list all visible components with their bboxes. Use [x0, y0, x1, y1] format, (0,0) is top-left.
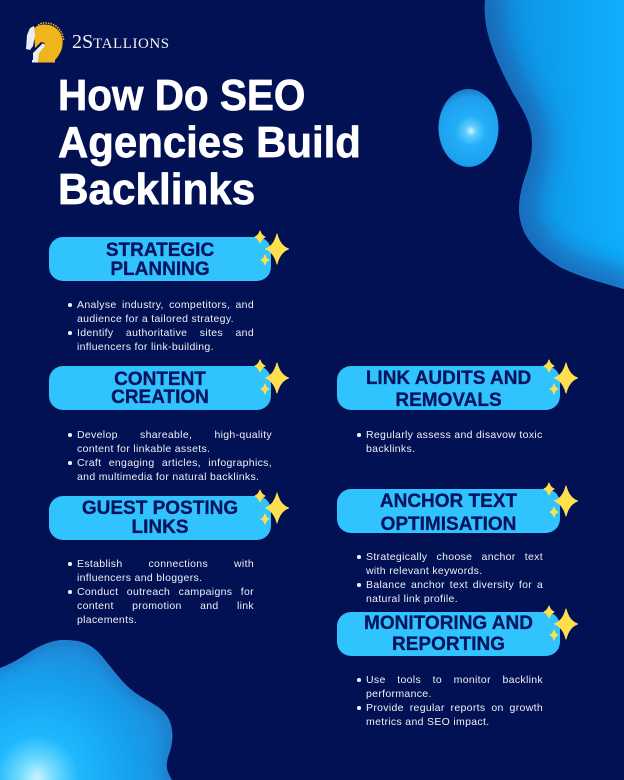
text block: guest posting bullets: influencers and bloggers. — [77, 572, 202, 584]
text block: link audits bullets — [357, 429, 543, 455]
top right blob — [484, 0, 624, 289]
text block: strategic planning bullets: Analyse industry, competitors, and — [77, 299, 254, 311]
text block: monitoring bullets: Use tools to monitor backlink — [366, 674, 543, 686]
text block: monitoring bullets: metrics and SEO impact. — [366, 716, 489, 728]
panel: anchor text optimisation heading: ANCHOR TEXT — [380, 491, 517, 512]
panel: monitoring and reporting heading: REPORTING — [392, 634, 505, 655]
text block: strategic planning bullets: influencers for link-building. — [77, 341, 214, 353]
title: How Do SEO — [58, 71, 305, 120]
logo: 2Stallions horse icon — [26, 22, 65, 62]
text block: guest posting bullets: Establish connections with — [77, 558, 254, 570]
text block: content creation bullets: Develop shareable, high-quality — [77, 429, 272, 441]
title: Agencies Build — [58, 118, 361, 167]
text block: strategic planning bullets: Identify authoritative sites and — [77, 327, 254, 339]
text block: monitoring bullets: Provide regular reports on growth — [366, 702, 543, 714]
text block: guest posting bullets: Conduct outreach campaigns for — [77, 586, 254, 598]
panel: strategic planning heading: STRATEGIC — [106, 240, 214, 261]
text block: content creation bullets: and multimedia for natural backlinks. — [77, 471, 259, 483]
text block: monitoring bullets: performance. — [366, 688, 432, 700]
panel: guest posting links heading — [49, 496, 271, 540]
panel: link audits and removals heading: REMOVALS — [395, 390, 502, 411]
title — [58, 71, 361, 214]
panel: link audits and removals heading: LINK AUDITS AND — [366, 368, 531, 389]
panel: content creation heading — [49, 366, 271, 410]
panel: content creation heading: CONTENT — [114, 369, 206, 390]
panel: guest posting links heading: LINKS — [132, 517, 188, 538]
text block: guest posting bullets — [68, 558, 254, 626]
icon: sparkles — [254, 230, 289, 266]
text block: guest posting bullets: content promotion and link — [77, 600, 254, 612]
text block: content creation bullets: content for linkable assets. — [77, 443, 210, 455]
icon: sparkles — [544, 606, 578, 640]
panel: strategic planning heading: PLANNING — [110, 259, 210, 280]
text block: content creation bullets — [68, 429, 272, 483]
icon: sparkles — [544, 360, 578, 394]
sphere — [438, 89, 498, 167]
panel: monitoring and reporting heading: MONITORING AND — [364, 613, 533, 634]
icon: sparkles — [254, 360, 289, 394]
text block: anchor text bullets: Balance anchor text diversity for a — [366, 579, 543, 591]
panel: link audits and removals heading — [337, 366, 560, 410]
text block: link audits bullets: Regularly assess and disavow toxic — [366, 429, 543, 441]
icon: sparkles — [544, 482, 578, 518]
title: Backlinks — [58, 165, 255, 214]
text block: strategic planning bullets — [68, 299, 254, 353]
logo wordmark: 2STALLIONS — [72, 31, 170, 53]
panel: anchor text optimisation heading — [337, 489, 560, 533]
panel: strategic planning heading — [49, 237, 271, 281]
text block: monitoring bullets — [357, 674, 543, 728]
text block: anchor text bullets — [357, 551, 543, 605]
text block: guest posting bullets: placements. — [77, 614, 137, 626]
text block: anchor text bullets: Strategically choose anchor text — [366, 551, 543, 563]
text block: strategic planning bullets: audience for a tailored strategy. — [77, 313, 234, 325]
bottom left blob — [0, 640, 172, 780]
text block: content creation bullets: Craft engaging articles, infographics, — [77, 457, 272, 469]
text block: anchor text bullets: natural link profile. — [366, 593, 458, 605]
text block: link audits bullets: backlinks. — [366, 443, 415, 455]
panel: guest posting links heading: GUEST POSTING — [82, 498, 238, 519]
icon: sparkles — [254, 490, 289, 524]
text block: anchor text bullets: with relevant keywords. — [366, 565, 482, 577]
panel: content creation heading: CREATION — [111, 387, 209, 408]
panel: monitoring and reporting heading — [337, 612, 560, 656]
panel: anchor text optimisation heading: OPTIMISATION — [381, 514, 516, 535]
